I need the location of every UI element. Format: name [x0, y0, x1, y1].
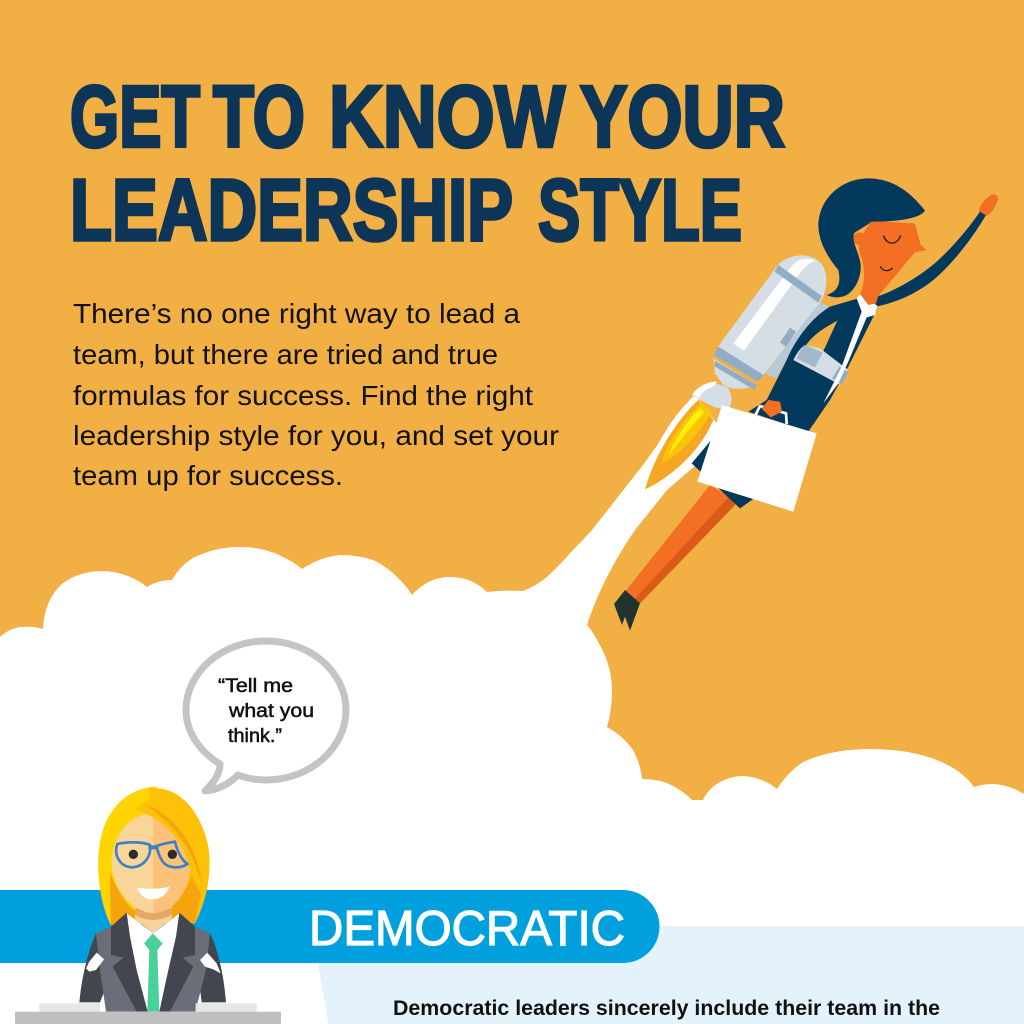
title: STYLE — [538, 162, 742, 259]
tank clip — [780, 328, 796, 347]
speech bubble quote: think.” — [228, 726, 282, 747]
jacket — [748, 298, 877, 432]
hand raised — [979, 194, 998, 216]
podium — [15, 1003, 281, 1024]
neck and face — [853, 220, 927, 305]
democratic banner — [0, 890, 660, 963]
tank highlight — [733, 259, 815, 351]
hand on handle — [762, 400, 782, 417]
raised arm — [875, 211, 986, 307]
title: GET — [70, 68, 200, 166]
shirt — [123, 913, 182, 1012]
speech bubble — [186, 641, 346, 791]
glasses — [116, 842, 187, 867]
eye — [884, 236, 900, 243]
leader at podium — [15, 787, 281, 1024]
eyes — [129, 850, 177, 859]
jetpack woman — [614, 178, 998, 631]
suit jacket — [79, 913, 226, 1012]
title: LEADERSHIP — [70, 162, 513, 259]
speech bubble quote: what you — [228, 701, 314, 722]
hair — [818, 178, 925, 297]
intro text: There’s no one right way to lead a — [73, 298, 520, 329]
tie — [144, 933, 163, 1012]
democratic description: Democratic leaders sincerely include their team in the — [393, 997, 940, 1020]
banner label: DEMOCRATIC — [309, 902, 625, 956]
tank body — [713, 255, 826, 382]
title: YOUR — [580, 68, 785, 166]
jetpack tank — [692, 255, 830, 409]
tank back — [765, 302, 830, 378]
smile — [880, 267, 892, 271]
speech bubble quote: “Tell me — [218, 676, 293, 697]
shoes — [614, 590, 640, 631]
cloud and rocket trail — [0, 397, 1024, 1024]
title: TO — [213, 68, 305, 166]
intro text: leadership style for you, and set your — [73, 420, 559, 451]
intro text — [73, 298, 559, 491]
skirt — [692, 433, 800, 508]
light blue panel — [312, 926, 1024, 1024]
title: KNOW — [329, 68, 566, 166]
smile — [137, 887, 169, 899]
strap — [793, 345, 848, 385]
briefcase — [697, 405, 817, 512]
gap under arm — [806, 321, 837, 353]
briefcase handle — [755, 406, 787, 424]
neck — [135, 903, 172, 933]
intro text: team up for success. — [73, 460, 343, 491]
nozzle — [692, 384, 731, 409]
intro text: formulas for success. Find the right — [73, 380, 533, 411]
legs — [625, 485, 738, 603]
shirt — [823, 293, 877, 403]
flame — [641, 395, 717, 493]
hair back — [98, 787, 210, 925]
tank bands — [775, 265, 822, 303]
face — [112, 813, 191, 913]
title — [70, 68, 785, 259]
speech bubble quote — [218, 676, 314, 747]
microphones — [86, 953, 221, 973]
fringe — [135, 800, 203, 895]
intro text: team, but there are tried and true — [73, 339, 498, 370]
